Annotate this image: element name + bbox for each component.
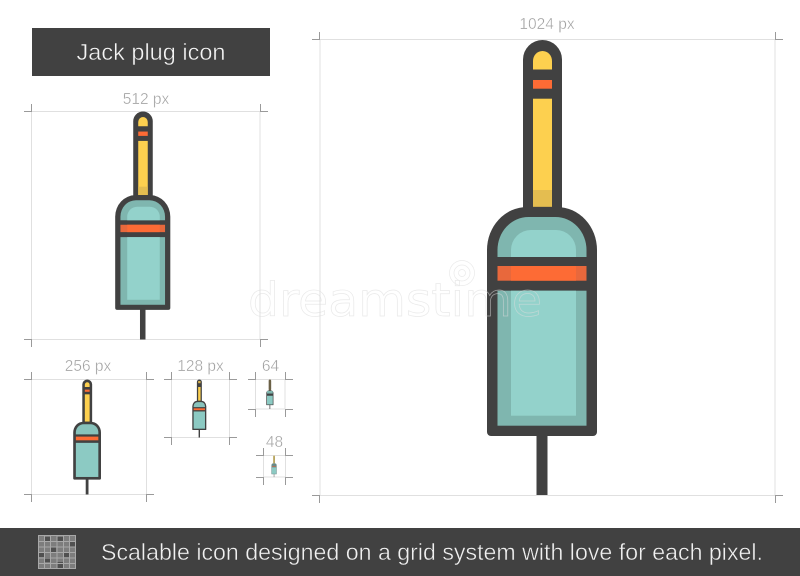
label: 64: 64 [262,358,279,375]
title banner: Jack plug icon [76,39,226,65]
frame: 256 px [24,372,154,502]
icon: jack plug 512 [115,112,170,340]
label: 512 px: 512 px [123,91,170,108]
panel: 128 px icon [164,358,237,445]
panel: 256 px icon [24,358,154,502]
footer caption: Scalable icon designed on a grid system with love for each pixel. [101,539,763,565]
frame: 128 px [164,372,237,445]
footer bar [0,528,800,576]
watermark: dreamstime [248,273,542,327]
panel: 64 px icon [248,358,293,417]
frame: 64 px [248,372,293,417]
frame: 1024 px [312,32,783,503]
title banner [32,28,270,76]
panel: 512 px icon [24,91,268,347]
label: 128 px: 128 px [177,358,224,375]
icon: jack plug 64 [266,380,273,409]
frame: 48 px [256,448,293,485]
icon: jack plug 128 [192,380,206,438]
label: 48: 48 [266,434,283,451]
panel: 1024 px icon [312,16,783,503]
panel: 48 px icon [256,434,293,485]
frame: 512 px [24,104,268,347]
label: 1024 px: 1024 px [519,16,575,33]
icon: jack plug 48 [271,456,277,477]
icon: jack plug large [487,40,597,495]
icon: pixel grid [38,535,76,569]
label: 256 px: 256 px [65,358,112,375]
icon: jack plug 256 [73,380,101,494]
